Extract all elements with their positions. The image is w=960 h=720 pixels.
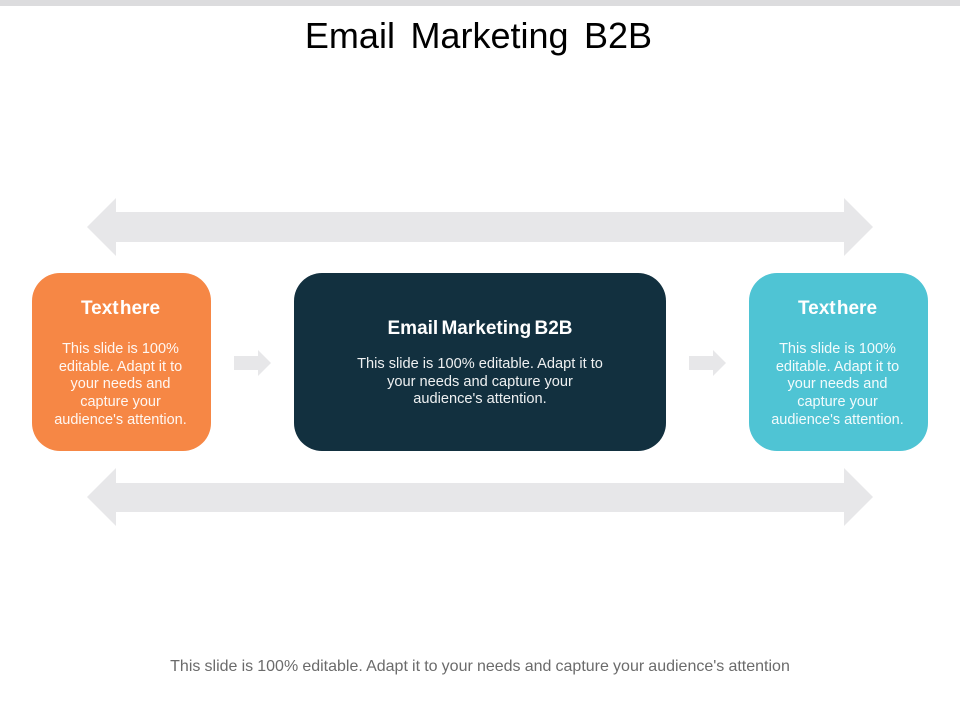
arrow: bottom double-headed — [87, 468, 873, 526]
panel: left orange — [32, 273, 211, 451]
arrow: top double-headed — [87, 198, 873, 256]
right body text: your needs and — [788, 376, 887, 392]
left body text: This slide is 100% — [62, 341, 179, 357]
panel: center navy — [294, 273, 666, 451]
left body text: your needs and — [71, 376, 170, 392]
center body text: audience's attention. — [413, 391, 547, 407]
center body text: This slide is 100% editable. Adapt it to — [357, 356, 603, 372]
center body text — [357, 356, 603, 407]
panel: right teal — [749, 273, 928, 451]
left body text: editable. Adapt it to — [59, 359, 182, 375]
title: Email Marketing B2B — [305, 15, 652, 56]
right body text: editable. Adapt it to — [776, 359, 899, 375]
arrow: right small — [689, 350, 726, 376]
right heading: Text here — [798, 298, 877, 319]
right body text — [771, 341, 904, 428]
left body text — [54, 341, 187, 428]
right body text: audience's attention. — [771, 412, 904, 428]
right body text: capture your — [797, 394, 878, 410]
right body text: This slide is 100% — [779, 341, 896, 357]
left body text: capture your — [80, 394, 161, 410]
left heading: Text here — [81, 298, 160, 319]
footer caption: This slide is 100% editable. Adapt it to your needs and capture your audience's attention — [170, 658, 790, 675]
arrow: left small — [234, 350, 271, 376]
center body text: your needs and capture your — [387, 374, 573, 390]
top bar — [0, 0, 960, 6]
left body text: audience's attention. — [54, 412, 187, 428]
center heading: Email Marketing B2B — [388, 318, 572, 339]
